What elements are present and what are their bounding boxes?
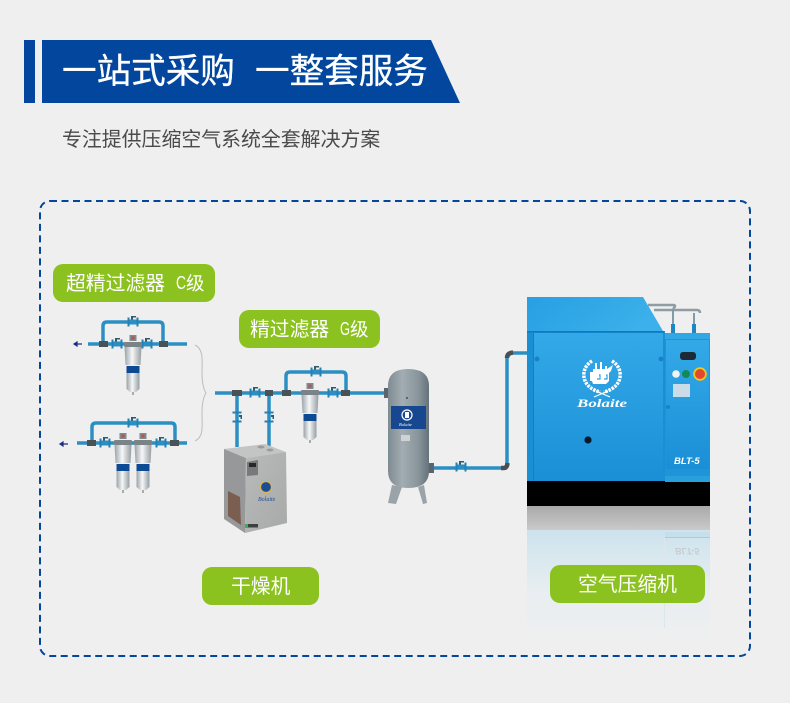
label: G grade filter xyxy=(239,310,380,348)
dryer logo xyxy=(260,482,272,492)
tank label xyxy=(391,406,426,429)
compressor outlet pipes xyxy=(648,305,700,333)
C grade filter double xyxy=(60,417,187,493)
label: air compressor: 空气压缩机 xyxy=(578,574,677,596)
G grade filter xyxy=(301,383,319,443)
buttons xyxy=(672,370,680,378)
label: dryer xyxy=(202,567,319,605)
compressor door handle hole xyxy=(584,436,592,444)
label: G grade filter: G xyxy=(340,319,350,339)
label: air compressor xyxy=(550,565,705,603)
title banner: 一站式采购 xyxy=(62,53,235,91)
dryer tag xyxy=(248,524,258,528)
label: C grade filter xyxy=(53,264,215,302)
subtitle: 专注提供压缩空气系统全套解决方案 xyxy=(62,128,380,151)
dryer control xyxy=(247,460,258,476)
dashed system frame xyxy=(40,201,750,656)
label: C grade filter: 超精过滤器 xyxy=(66,273,165,295)
label: C grade filter: 级 xyxy=(186,273,205,294)
brace connector xyxy=(195,345,206,441)
refrigerated dryer: Bolaite xyxy=(258,497,276,503)
label: G grade filter: 精过滤器 xyxy=(250,319,329,341)
compressor logo: Bolaite xyxy=(576,396,628,410)
C grade filter single xyxy=(74,316,187,395)
title banner xyxy=(24,40,460,103)
compressor top cover xyxy=(527,297,663,331)
piping tank to compressor xyxy=(429,352,527,472)
title banner: 一整套服务 xyxy=(255,53,428,91)
compressor base xyxy=(527,481,710,506)
compressor main door xyxy=(527,331,665,481)
model name: BLT-5 xyxy=(674,456,700,467)
compressor logo xyxy=(576,361,628,410)
compressor control panel xyxy=(665,333,710,482)
label: C grade filter: C xyxy=(176,273,186,293)
dryer vent xyxy=(228,491,241,525)
display xyxy=(680,352,696,360)
air compressor machine xyxy=(527,297,710,645)
air receiver tank: Bolaite xyxy=(399,422,412,427)
label: G grade filter: 级 xyxy=(350,319,369,340)
arrow left xyxy=(74,342,82,346)
sticker xyxy=(673,384,690,397)
reflection under compressor xyxy=(527,506,710,645)
air receiver tank xyxy=(384,369,434,504)
arrow left xyxy=(60,442,68,446)
piping main line with bypass xyxy=(215,366,388,447)
refrigerated dryer xyxy=(224,444,287,533)
label: dryer: 干燥机 xyxy=(231,576,291,598)
reflection under compressor: BLT-5 xyxy=(675,546,700,556)
